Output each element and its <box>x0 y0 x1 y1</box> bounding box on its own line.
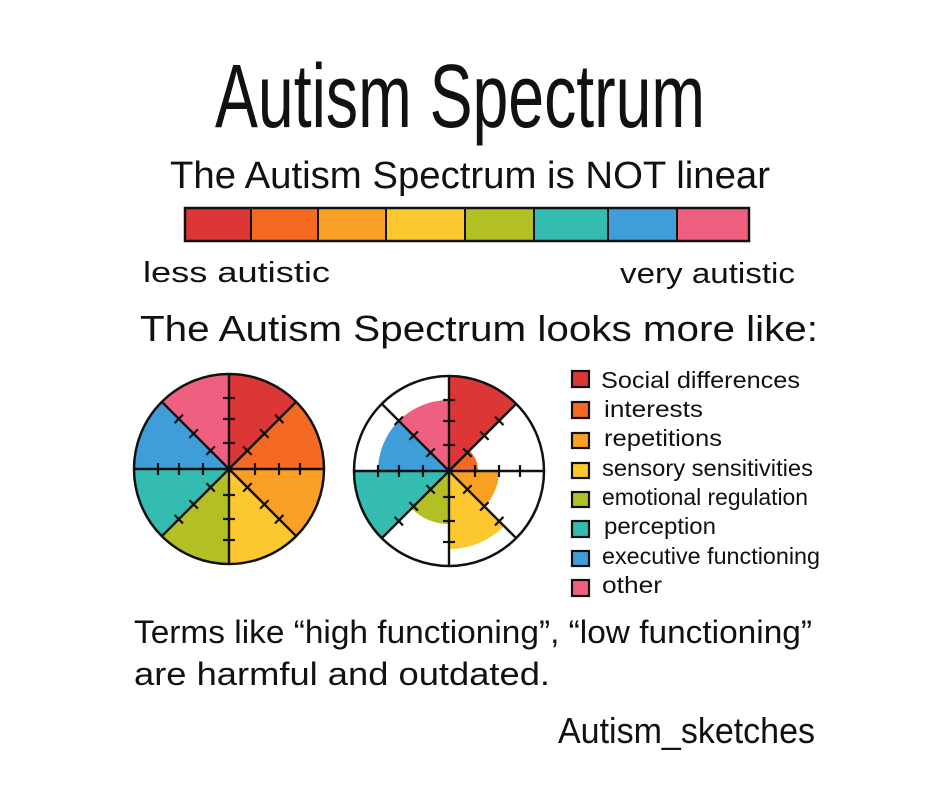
note text: Terms like “high functioning”, “low functioning” <box>134 614 812 650</box>
legend item: other <box>572 572 662 598</box>
legend item: sensory sensitivities: sensory sensitivities <box>602 455 813 481</box>
label: very autistic: very autistic <box>620 258 795 290</box>
note text <box>134 614 812 692</box>
legend item: perception: perception <box>604 513 716 539</box>
label: less autistic: less autistic <box>143 257 330 289</box>
legend item: executive functioning: executive functioning <box>602 543 820 569</box>
legend item: social differences: Social differences <box>601 367 800 393</box>
legend item: interests: interests <box>604 396 703 422</box>
heading: looks more like: The Autism Spectrum looks more like: <box>140 308 818 349</box>
full colour wheel chart <box>114 354 344 584</box>
legend item: emotional regulation: emotional regulation <box>602 484 808 510</box>
legend <box>572 367 820 598</box>
legend item: interests <box>572 396 703 422</box>
linear spectrum bar <box>185 208 749 241</box>
subtitle: The Autism Spectrum is NOT linear <box>170 155 770 197</box>
signature: Autism_sketches <box>558 710 815 751</box>
legend item: repetitions: repetitions <box>604 425 722 451</box>
title: Autism Spectrum <box>215 47 705 147</box>
note text: are harmful and outdated. <box>134 656 550 692</box>
legend item: other: other <box>602 572 662 598</box>
varied radial profile chart <box>334 376 544 566</box>
